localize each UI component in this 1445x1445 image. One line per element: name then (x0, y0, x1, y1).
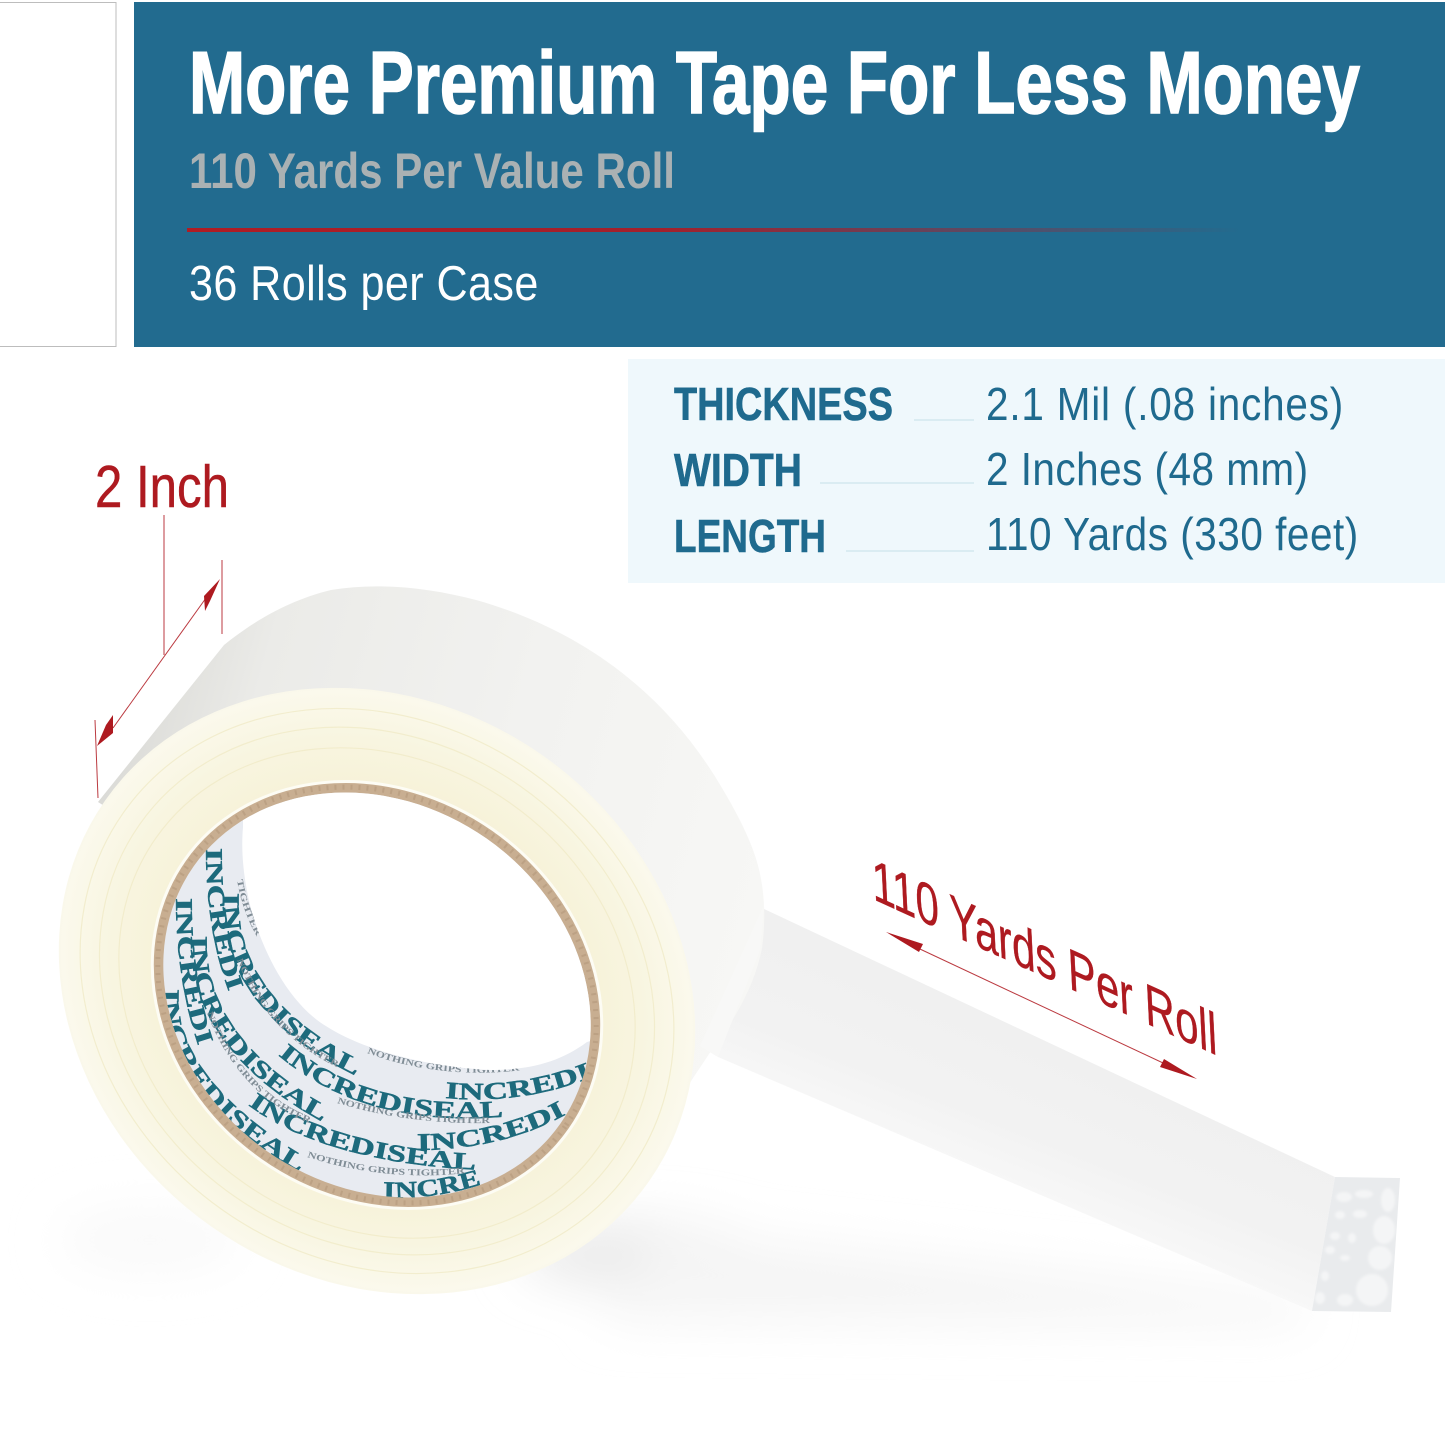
width label: WIDTH (674, 444, 802, 496)
thickness label: THICKNESS (674, 378, 893, 430)
core interior with printed branding: NOTHING GRIPS TIGHTER (207, 1011, 310, 1124)
core interior with printed branding: INCREDI (446, 1062, 586, 1100)
core interior with printed branding: INCREDISEAL (190, 936, 324, 1122)
subtitle: 110 Yards Per Value Roll (189, 143, 675, 199)
core interior with printed branding: INCRE (384, 1170, 480, 1198)
core interior with printed branding: INCREDISEAL (222, 894, 357, 1076)
soft shadow under roll and strip (60, 1210, 1310, 1325)
strip end flap (1312, 1177, 1400, 1312)
length label: LENGTH (674, 510, 826, 562)
panel: header banner (134, 2, 1445, 347)
roll outer side (98, 586, 764, 1149)
illustration: tape roll (59, 586, 764, 1294)
core interior with printed branding: INCREDI (176, 898, 214, 1046)
cardboard core ring (69, 695, 685, 1295)
roll front face (0, 565, 814, 1417)
width dimension: 2 Inch (95, 454, 229, 798)
core interior with printed branding: TIGHTER (237, 879, 259, 936)
core interior with printed branding: NOTHING GRIPS TIGHTER (337, 1097, 490, 1124)
length dimension: 110 Yards Per Roll (870, 847, 1219, 1079)
tape strip overlap on the roll (700, 905, 764, 1057)
core interior with printed branding: NOTHING GRIPS TIGHTER (237, 958, 338, 1068)
panel: specifications (628, 359, 1445, 583)
length value: 110 Yards (330 feet) (986, 510, 1358, 561)
core interior with printed branding (163, 792, 591, 1198)
width label: 2 Inch (95, 454, 229, 520)
core interior with printed branding: INCREDISEAL (278, 1043, 502, 1118)
length label: 110 Yards Per Roll (870, 847, 1219, 1069)
illustration: tape strip (700, 908, 1400, 1312)
red divider (187, 228, 1240, 232)
see-through hole of the core (242, 792, 591, 1070)
core interior with printed branding: NOTHING GRIPS TIGHTER (367, 1048, 520, 1073)
core interior with printed branding: INCREDI (418, 1100, 566, 1150)
core interior with printed branding: INCREDI (206, 848, 244, 991)
width value: 2 Inches (48 mm) (986, 445, 1308, 496)
arrowheads (204, 579, 220, 611)
thickness value: 2.1 Mil (.08 inches) (986, 380, 1343, 431)
arrowheads (886, 932, 923, 952)
core interior with printed branding: INCREDISEAL (165, 990, 301, 1170)
case quantity: 36 Rolls per Case (189, 255, 538, 311)
core interior with printed branding: NOTHING GRIPS TIGHTER (307, 1152, 465, 1176)
core interior with printed branding: INCREDISEAL (248, 1092, 475, 1170)
blank left header panel (0, 2, 116, 346)
